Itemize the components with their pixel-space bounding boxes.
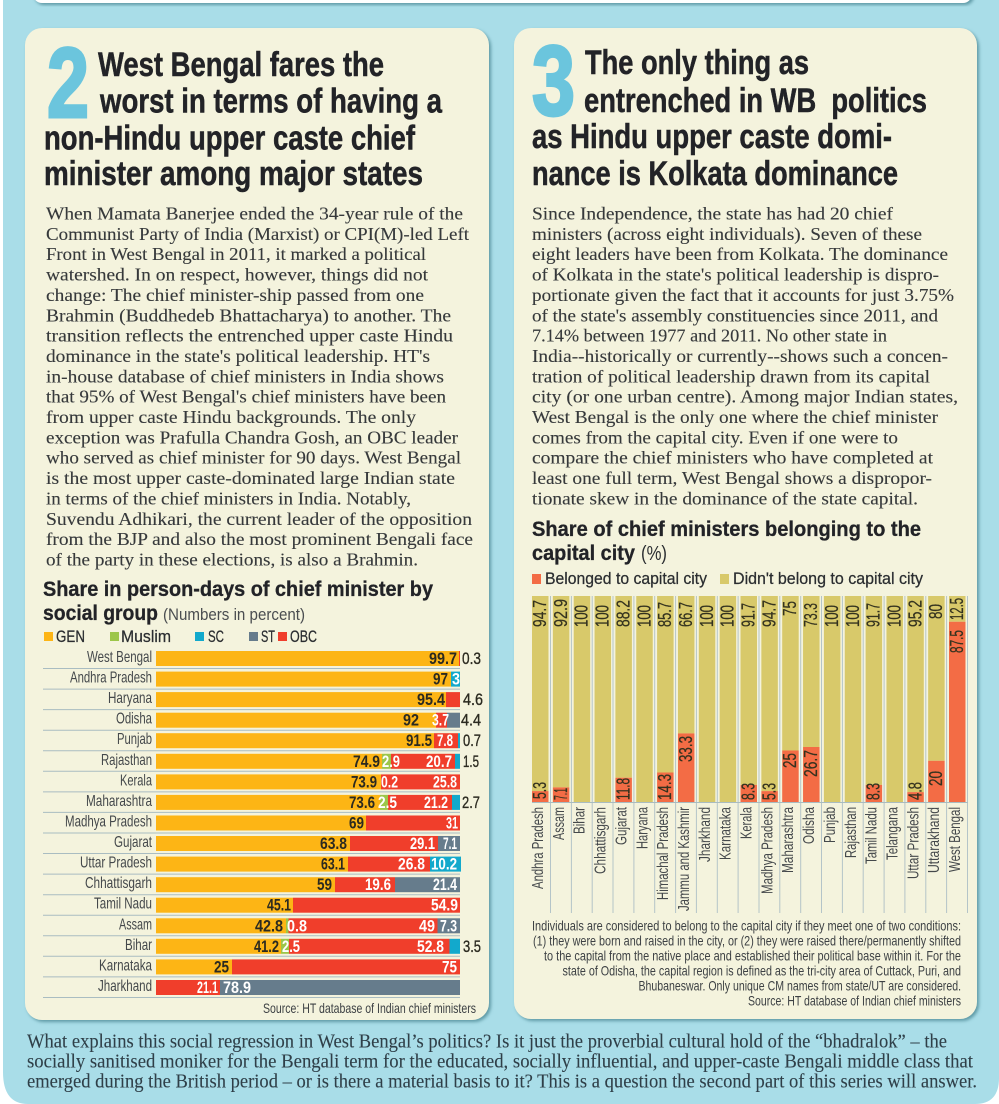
column: Tamil Nadu: 8.3 bbox=[864, 783, 884, 800]
chart heading bbox=[532, 517, 921, 565]
big number 3: 3 bbox=[532, 25, 575, 136]
column: Jharkhand: 100 bbox=[697, 605, 717, 627]
row: Jharkhand: Jharkhand bbox=[98, 978, 152, 995]
body text: Since Independence, the state has had 20 chief bbox=[532, 204, 894, 224]
column: Assam bbox=[551, 596, 571, 840]
row: Bihar: 52.8 bbox=[417, 937, 444, 956]
column: Gujarat bbox=[613, 596, 633, 845]
row: Gujarat: 7.1 bbox=[443, 834, 457, 853]
row: Punjab: 7.8 bbox=[437, 731, 453, 750]
row: Bihar: 41.2 bbox=[254, 937, 279, 956]
row: West Bengal: West Bengal bbox=[87, 649, 152, 666]
body text: tration of political leadership drawn from its capital bbox=[532, 366, 930, 386]
row: Rajasthan: 74.9 bbox=[353, 752, 380, 771]
row: Maharashtra: Maharashtra bbox=[86, 793, 152, 810]
column: West Bengal: 12.5 bbox=[947, 598, 967, 620]
row: Rajasthan: 2.9 bbox=[382, 752, 400, 771]
chart heading: Share of chief ministers belonging to the bbox=[532, 517, 921, 541]
legend: social groups: SC bbox=[208, 627, 224, 646]
row: Maharashtra: 2.5 bbox=[378, 793, 397, 812]
heading: minister among major states bbox=[44, 155, 423, 193]
body text: of Kolkata in the state's political leadership is dispro- bbox=[532, 265, 939, 285]
row: Assam: 7.3 bbox=[440, 916, 457, 935]
row: Jharkhand: 78.9 bbox=[223, 978, 251, 997]
row: Uttar Pradesh: 10.2 bbox=[431, 855, 457, 874]
row: Gujarat: 63.8 bbox=[320, 834, 347, 853]
row: Haryana: 4.6 bbox=[463, 690, 483, 709]
row: Tamil Nadu bbox=[43, 896, 460, 915]
column: Madhya Pradesh: 5.3 bbox=[759, 783, 779, 800]
closing paragraph bbox=[27, 1032, 977, 1092]
column: Jammu and Kashmir: Jammu and Kashmir bbox=[676, 807, 693, 911]
body text: from upper caste Hindu backgrounds. The only bbox=[46, 407, 417, 427]
chart heading bbox=[43, 577, 433, 625]
chart heading: social group bbox=[43, 601, 158, 625]
legend: social groups: GEN bbox=[56, 627, 85, 646]
heading: The only thing as bbox=[585, 44, 809, 82]
body text: least one full term, West Bengal shows a dispropor- bbox=[532, 468, 932, 488]
row: Jharkhand bbox=[43, 978, 460, 998]
body text: Front in West Bengal in 2011, it marked a political bbox=[46, 244, 426, 264]
column: Rajasthan: Rajasthan bbox=[843, 807, 860, 858]
row: Jharkhand: 21.1 bbox=[197, 978, 218, 997]
row: Karnataka bbox=[43, 957, 460, 977]
column: Odisha bbox=[801, 596, 821, 844]
column: Rajasthan bbox=[843, 596, 863, 858]
row: Odisha: 3.7 bbox=[432, 711, 449, 730]
row: Punjab: Punjab bbox=[117, 731, 152, 748]
legend: social groups: OBC bbox=[290, 627, 317, 646]
chart heading: (%) bbox=[641, 543, 667, 565]
column: Gujarat: 11.8 bbox=[613, 778, 633, 800]
row: Chhattisgarh: 59 bbox=[317, 875, 332, 894]
row: Rajasthan bbox=[43, 752, 479, 771]
row: Maharashtra: 2.7 bbox=[462, 793, 480, 812]
column: Maharashtra bbox=[780, 596, 800, 873]
heading: West Bengal fares the bbox=[98, 46, 384, 84]
column: Telangana: Telangana bbox=[884, 807, 901, 860]
column: Tamil Nadu bbox=[864, 596, 884, 864]
body text: in-house database of chief ministers in India shows bbox=[46, 366, 444, 386]
column: Assam: 92.9 bbox=[551, 599, 571, 627]
row: Andhra Pradesh bbox=[43, 670, 460, 689]
panel card 3 bbox=[514, 28, 977, 1019]
heading: worst in terms of having a bbox=[99, 82, 443, 120]
row: Haryana bbox=[43, 690, 483, 710]
column: Haryana: 100 bbox=[634, 605, 654, 627]
legend: capital city bbox=[532, 569, 923, 588]
column: Madhya Pradesh: 94.7 bbox=[759, 600, 779, 627]
column: Punjab: Punjab bbox=[822, 807, 839, 843]
column: Uttar Pradesh: 95.2 bbox=[905, 600, 925, 627]
row: Uttar Pradesh bbox=[43, 855, 461, 874]
column chart: capital city share bbox=[530, 596, 968, 913]
row: Karnataka: Karnataka bbox=[99, 957, 152, 974]
column: Uttarakhand: 20 bbox=[926, 771, 946, 786]
column: Jammu and Kashmir: 33.3 bbox=[676, 736, 696, 762]
row: Bihar: 3.5 bbox=[463, 937, 481, 956]
column: Gujarat: 88.2 bbox=[613, 600, 633, 627]
body text: that 95% of West Bengal's chief ministers have been bbox=[46, 387, 446, 407]
column: West Bengal bbox=[947, 596, 967, 872]
body text: tionate skew in the dominance of the state capital. bbox=[532, 488, 918, 508]
big number 2: 2 bbox=[47, 27, 89, 138]
column: Chhattisgarh: 100 bbox=[593, 605, 613, 627]
body text bbox=[532, 204, 958, 508]
column: Kerala: Kerala bbox=[738, 807, 756, 839]
row: Odisha bbox=[43, 711, 481, 730]
column: Karnataka bbox=[718, 596, 738, 860]
column: Haryana: Haryana bbox=[634, 807, 651, 849]
row: Uttar Pradesh: Uttar Pradesh bbox=[80, 855, 152, 872]
column: Kerala: 8.3 bbox=[738, 783, 758, 800]
column: Bihar bbox=[572, 596, 592, 834]
column: Haryana bbox=[634, 596, 654, 849]
column: Jharkhand: Jharkhand bbox=[697, 807, 714, 862]
row: Gujarat: Gujarat bbox=[114, 834, 152, 851]
row: Odisha: 4.4 bbox=[461, 711, 481, 730]
body text: transition reflects the entrenched upper caste Hindu bbox=[46, 326, 453, 346]
body text: in terms of the chief ministers in India. Notably, bbox=[46, 488, 411, 508]
source note: Source: HT database of Indian chief ministers bbox=[263, 1000, 476, 1016]
row: Maharashtra: 21.2 bbox=[424, 793, 448, 812]
body text: Suvendu Adhikari, the current leader of the opposition bbox=[46, 509, 472, 529]
row: Odisha: 92 bbox=[403, 711, 419, 730]
row: Chhattisgarh: 19.6 bbox=[365, 875, 391, 894]
legend: capital city: Belonged to capital city bbox=[545, 569, 707, 588]
chart heading: (Numbers in percent) bbox=[163, 605, 305, 624]
column: Odisha: Odisha bbox=[801, 807, 818, 844]
body text: portionate given the fact that it accounts for just 3.75% bbox=[532, 285, 954, 305]
row: Bihar bbox=[43, 937, 481, 956]
row: Uttar Pradesh: 26.8 bbox=[398, 855, 425, 874]
column: Madhya Pradesh: Madhya Pradesh bbox=[759, 807, 776, 894]
column: Bihar: Bihar bbox=[572, 807, 589, 834]
column: Maharashtra: 25 bbox=[780, 753, 800, 768]
column: Uttarakhand: 80 bbox=[926, 604, 946, 619]
column: Uttar Pradesh: Uttar Pradesh bbox=[905, 807, 922, 879]
body text: eight leaders have been from Kolkata. The dominance bbox=[532, 244, 948, 264]
body text: who served as chief minister for 90 days. West Bengal bbox=[46, 448, 461, 468]
column: Jammu and Kashmir: 66.7 bbox=[676, 602, 696, 627]
row: Rajasthan: 20.7 bbox=[426, 752, 452, 771]
column: Punjab: 100 bbox=[822, 605, 842, 627]
column: Assam: Assam bbox=[551, 807, 568, 840]
heading: non-Hindu upper caste chief bbox=[44, 120, 416, 158]
row: Tamil Nadu: Tamil Nadu bbox=[94, 896, 152, 913]
column: Punjab bbox=[822, 596, 842, 843]
column: Telangana bbox=[884, 596, 904, 860]
column: West Bengal: 87.5 bbox=[947, 630, 967, 653]
row: Gujarat: 29.1 bbox=[410, 834, 435, 853]
column: Himachal Pradesh: 85.7 bbox=[655, 602, 675, 627]
row: Haryana: 95.4 bbox=[417, 690, 445, 709]
column: Karnataka: 100 bbox=[718, 605, 738, 627]
row: Assam: 0.8 bbox=[287, 916, 307, 935]
closing paragraph: What explains this social regression in West Bengal’s politics? Is it just the proverbial cultural hold of the “bhadralok” – the bbox=[27, 1032, 947, 1053]
row: Gujarat bbox=[43, 834, 460, 854]
column: Maharashtra: 75 bbox=[780, 601, 800, 616]
heading: as Hindu upper caste domi- bbox=[532, 118, 892, 156]
body text: Communist Party of India (Marxist) or CPI(M)-led Left bbox=[46, 224, 469, 245]
row: Karnataka: 75 bbox=[442, 957, 457, 976]
column: Himachal Pradesh: 14.3 bbox=[655, 774, 675, 800]
row: Tamil Nadu: 45.1 bbox=[267, 896, 291, 915]
row: West Bengal bbox=[43, 649, 481, 668]
row: Uttar Pradesh: 63.1 bbox=[321, 855, 345, 874]
panel card 2 bbox=[25, 28, 489, 1020]
body text: ministers (across eight individuals). Seven of these bbox=[532, 224, 922, 245]
column: Uttarakhand bbox=[926, 596, 946, 873]
row: Kerala bbox=[43, 772, 460, 792]
column: Karnataka: Karnataka bbox=[718, 807, 735, 860]
row: Maharashtra: 73.6 bbox=[349, 793, 375, 812]
body text: comes from the capital city. Even if one were to bbox=[532, 427, 898, 447]
body text: watershed. In on respect, however, things did not bbox=[46, 265, 428, 285]
column: Himachal Pradesh bbox=[655, 596, 675, 900]
body text: compare the chief ministers who have completed at bbox=[532, 448, 933, 468]
column: Rajasthan: 100 bbox=[843, 605, 863, 627]
legend: social groups bbox=[44, 627, 317, 646]
body text: dominance in the state's political leadership. HT's bbox=[46, 346, 430, 366]
column: Jammu and Kashmir bbox=[676, 596, 696, 911]
row: Kerala: 73.9 bbox=[351, 772, 377, 791]
column: Andhra Pradesh bbox=[530, 596, 550, 889]
legend: capital city: Didn't belong to capital city bbox=[733, 569, 923, 588]
row: Andhra Pradesh: 97 bbox=[433, 670, 448, 689]
row: Chhattisgarh: Chhattisgarh bbox=[85, 875, 152, 892]
chart heading: Share in person-days of chief minister by bbox=[43, 577, 433, 601]
row: Tamil Nadu: 54.9 bbox=[431, 896, 458, 915]
column: Tamil Nadu: 91.7 bbox=[864, 603, 884, 627]
body text: When Mamata Banerjee ended the 34-year rule of the bbox=[46, 204, 463, 224]
row: Assam: 49 bbox=[419, 916, 435, 935]
closing paragraph: socially sanitised moniker for the Bengali term for the educated, socially influential, and upper-caste Bengali middle class that bbox=[27, 1052, 974, 1073]
column: Telangana: 100 bbox=[884, 605, 904, 627]
column: Andhra Pradesh: 5.3 bbox=[530, 782, 550, 799]
row: Madhya Pradesh bbox=[43, 814, 460, 833]
legend: social groups: Muslim bbox=[121, 627, 171, 646]
row: Bihar: 2.5 bbox=[282, 937, 300, 956]
column: Andhra Pradesh: Andhra Pradesh bbox=[530, 807, 547, 889]
body text: of the party in these elections, is also a Brahmin. bbox=[46, 550, 418, 570]
row: Assam: Assam bbox=[119, 916, 152, 933]
column: Uttarakhand: Uttarakhand bbox=[926, 807, 943, 873]
stacked bar chart: share in person-days bbox=[43, 649, 483, 998]
row: Kerala: 0.2 bbox=[381, 772, 398, 791]
heading bbox=[532, 44, 927, 193]
column: West Bengal: West Bengal bbox=[947, 807, 964, 872]
column: Assam: 7.1 bbox=[551, 788, 571, 800]
heading bbox=[44, 46, 443, 193]
body text: is the most upper caste-dominated large Indian state bbox=[46, 468, 455, 488]
row: Andhra Pradesh: 3 bbox=[452, 670, 460, 689]
column: Maharashtra: Maharashtra bbox=[780, 807, 797, 873]
row: West Bengal: 99.7 bbox=[429, 649, 457, 668]
row: Madhya Pradesh: 69 bbox=[349, 814, 364, 832]
column: Himachal Pradesh: Himachal Pradesh bbox=[655, 807, 672, 900]
row: Bihar: Bihar bbox=[125, 937, 152, 954]
chart heading: capital city bbox=[532, 541, 635, 565]
column: Chhattisgarh: Chhattisgarh bbox=[593, 807, 610, 874]
body text: city (or one urban centre). Among major Indian states, bbox=[532, 387, 958, 408]
row: Madhya Pradesh: Madhya Pradesh bbox=[65, 814, 152, 830]
column: Tamil Nadu: Tamil Nadu bbox=[864, 807, 881, 864]
row: Assam: 42.8 bbox=[255, 916, 283, 935]
column: Madhya Pradesh bbox=[759, 596, 779, 894]
column: Chhattisgarh bbox=[593, 596, 613, 874]
row: Madhya Pradesh: 31 bbox=[446, 814, 458, 832]
body text: exception was Prafulla Chandra Gosh, an OBC leader bbox=[46, 427, 458, 447]
row: Chhattisgarh bbox=[43, 875, 460, 895]
column: Bihar: 100 bbox=[572, 605, 592, 627]
row: Punjab: 0.7 bbox=[463, 731, 481, 750]
panel 3: Kolkata dominance bbox=[514, 25, 979, 1021]
row: West Bengal: 0.3 bbox=[462, 649, 481, 668]
body text: Brahmin (Buddhedeb Bhattacharya) to another. The bbox=[46, 305, 451, 326]
column: Odisha: 73.3 bbox=[801, 603, 821, 627]
legend: social groups: ST bbox=[261, 627, 275, 646]
column: Jharkhand bbox=[697, 596, 717, 862]
row: Chhattisgarh: 21.4 bbox=[433, 875, 457, 894]
methodology note and source bbox=[532, 918, 961, 1008]
column: Odisha: 26.7 bbox=[801, 750, 821, 777]
row: Rajasthan: 1.5 bbox=[463, 752, 479, 771]
column: Kerala: 91.7 bbox=[738, 603, 758, 627]
heading: nance is Kolkata dominance bbox=[532, 155, 898, 193]
row: Rajasthan: Rajasthan bbox=[101, 752, 152, 769]
row: Kerala: Kerala bbox=[120, 772, 152, 789]
panel 2: West Bengal non-Hindu upper caste CM bbox=[25, 27, 491, 1022]
body text: 7.14% between 1977 and 2011. No other state in bbox=[532, 326, 887, 346]
body text: West Bengal is the only one where the chief minister bbox=[532, 407, 938, 427]
column: Andhra Pradesh: 94.7 bbox=[530, 600, 550, 627]
row: Punjab: 91.5 bbox=[406, 731, 432, 750]
column: Uttar Pradesh: 4.8 bbox=[905, 782, 925, 800]
row: Kerala: 25.8 bbox=[433, 772, 457, 791]
body text: India--historically or currently--shows such a concen- bbox=[532, 346, 948, 366]
body text: change: The chief minister-ship passed from one bbox=[46, 285, 424, 305]
row: Assam bbox=[43, 916, 460, 936]
heading: entrenched in WB politics bbox=[584, 82, 927, 120]
row: Odisha: Odisha bbox=[116, 711, 152, 728]
column: Uttar Pradesh bbox=[905, 596, 925, 879]
row: Punjab bbox=[43, 731, 481, 751]
row: Karnataka: 25 bbox=[214, 957, 229, 976]
body text bbox=[46, 204, 473, 570]
column: Gujarat: Gujarat bbox=[613, 807, 630, 845]
body text: from the BJP and also the most prominent Bengali face bbox=[46, 529, 473, 549]
panel: cropped top card bbox=[33, 0, 972, 3]
row: Andhra Pradesh: Andhra Pradesh bbox=[70, 670, 152, 687]
body text: of the state's assembly constituencies since 2011, and bbox=[532, 305, 938, 325]
row: Haryana: Haryana bbox=[108, 690, 152, 707]
row: Maharashtra bbox=[43, 793, 480, 812]
column: Kerala bbox=[738, 596, 758, 839]
